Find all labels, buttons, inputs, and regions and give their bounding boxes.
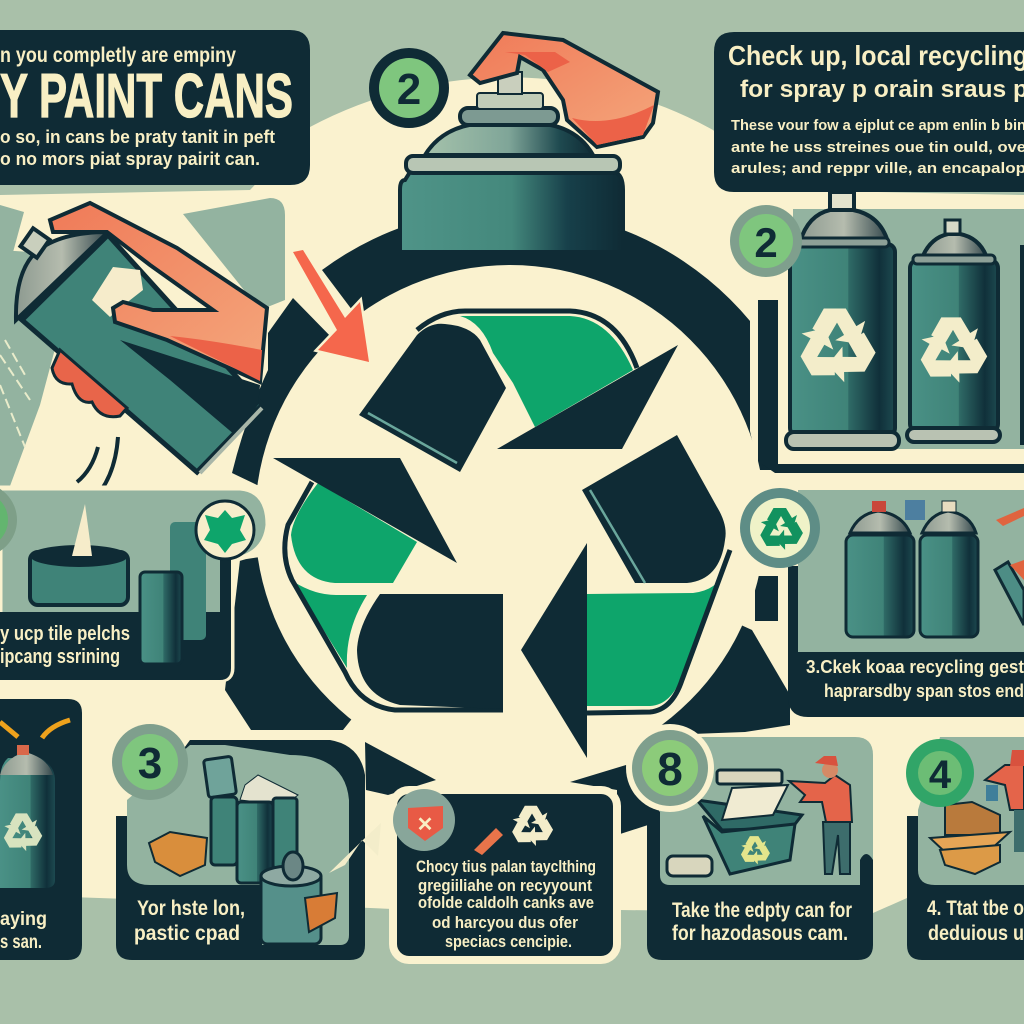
panel: bottom step 4 bbox=[906, 737, 1024, 960]
arrow: red bbox=[293, 250, 369, 362]
panel: bottom step 4: 4 bbox=[929, 753, 952, 797]
panel: top-right heading: arules; and reppr ville, an encapalop bbox=[731, 160, 1024, 177]
panel: bottom step 3: Yor hste lon, bbox=[137, 897, 245, 920]
panel: top-left heading: n you completly are empiny bbox=[0, 44, 236, 67]
spray lines bbox=[0, 340, 30, 447]
green band left bbox=[291, 483, 417, 583]
panel: bottom centre callout: Chocy tius palan tayclthing bbox=[416, 857, 596, 876]
panel: left middle pour: ipcang ssrining bbox=[0, 646, 120, 668]
dark block right bbox=[582, 435, 726, 583]
panel: bottom centre callout: speciacs cencipie. bbox=[445, 932, 572, 951]
panel: bottom step 3: pastic cpad bbox=[134, 922, 240, 945]
panel: top-right heading: These vour fow a ejplut ce apm enlin b bin bbox=[731, 117, 1024, 134]
panel: top-right heading: for spray p orain sraus p bbox=[740, 76, 1024, 103]
illustration: left spray can with hand bbox=[16, 203, 267, 503]
panel: bottom-left can: aying bbox=[0, 909, 47, 930]
panel: bottom centre callout: ✕ bbox=[417, 814, 433, 836]
panel: right middle cans bbox=[740, 488, 1024, 717]
badge: number 2 top bbox=[369, 48, 449, 128]
panel: top-left heading: o no mors piat spray pairit can. bbox=[0, 149, 260, 169]
panel: bottom-left can: s san. bbox=[0, 932, 42, 953]
panel: top-right heading: ante he uss streines oue tin ould, ove bbox=[731, 139, 1024, 156]
panel: bottom step 8 bbox=[626, 724, 873, 960]
panel: top-right heading bbox=[714, 32, 1024, 192]
dark arrowhead bottom bbox=[521, 543, 587, 758]
panel: bottom step 3 bbox=[112, 724, 381, 960]
sage patches left bbox=[0, 198, 285, 490]
panel: bottom step 3: 3 bbox=[138, 739, 162, 788]
panel: top-left heading: o so, in cans be praty tanit in peft bbox=[0, 127, 275, 147]
dark block top bbox=[359, 324, 506, 472]
panel: right top cans: 2 bbox=[754, 219, 778, 266]
panel: bottom centre callout: ofolde caldolh canks ave bbox=[418, 893, 594, 912]
panel: bottom-left can bbox=[0, 699, 82, 960]
green band right bbox=[587, 570, 725, 706]
dark block bottom bbox=[357, 594, 503, 709]
dark arrowhead right bbox=[497, 345, 678, 449]
recycling symbol bbox=[273, 311, 730, 758]
dark arrowhead left bbox=[273, 458, 457, 563]
panel: top-left heading: Y PAINT CANS bbox=[0, 62, 293, 131]
central cream disc bbox=[255, 265, 765, 775]
illustration: top spray can with hand bbox=[400, 33, 658, 252]
panel: top-left heading bbox=[0, 30, 310, 185]
panel: bottom centre callout: gregiiliahe on recyyount bbox=[418, 876, 592, 895]
badge: number 2 top: 2 bbox=[397, 65, 421, 114]
panel: left middle pour: y ucp tile pelchs bbox=[0, 623, 130, 645]
green band top bbox=[460, 316, 633, 427]
panel: bottom step 8: 8 bbox=[657, 743, 683, 795]
panel: left middle pour bbox=[0, 483, 268, 680]
panel: bottom step 8: Take the edpty can for bbox=[672, 899, 852, 922]
panel: bottom centre callout: od harcyou dus ofer bbox=[432, 913, 578, 932]
panel: right top cans bbox=[730, 192, 1024, 473]
central ring segments bbox=[225, 208, 790, 835]
panel: bottom centre callout bbox=[393, 789, 617, 960]
panel: bottom step 8: for hazodasous cam. bbox=[672, 922, 848, 945]
